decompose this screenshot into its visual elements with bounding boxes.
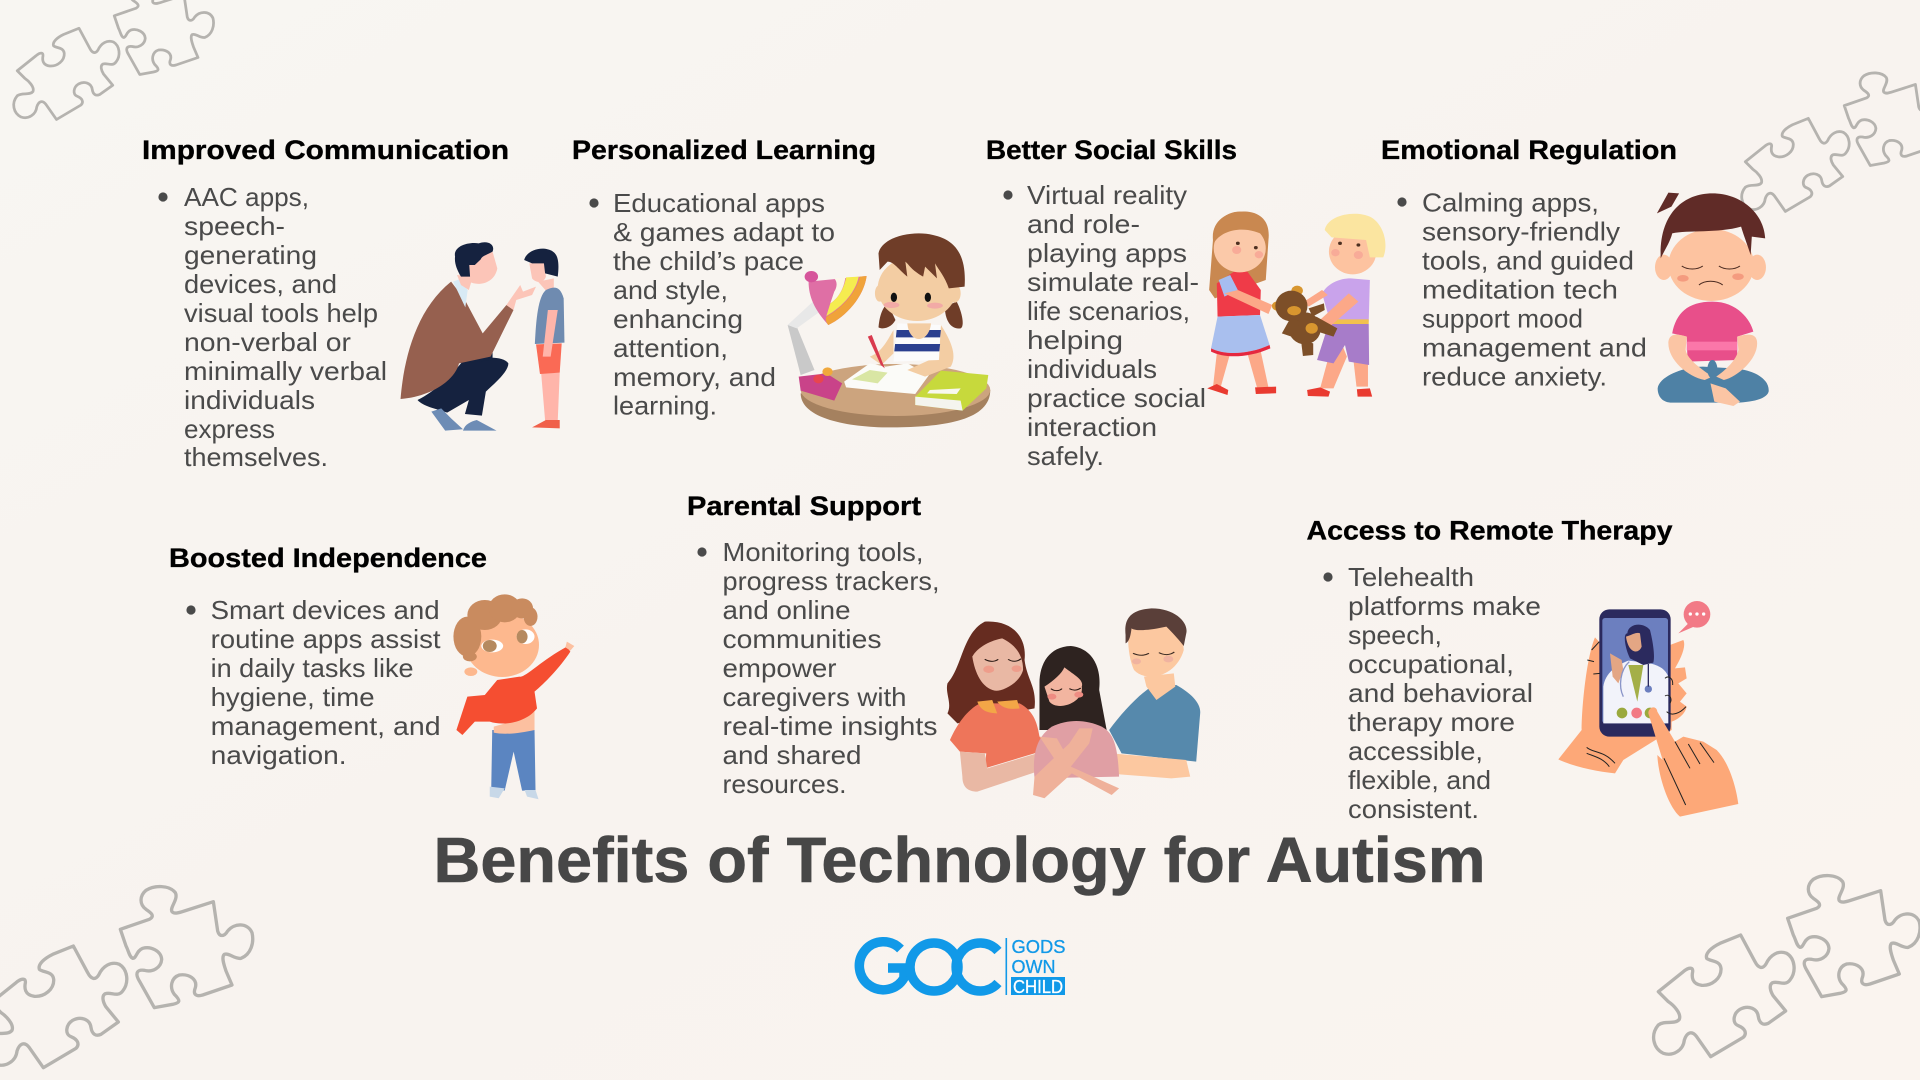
illustration: meditating boy: [1655, 193, 1769, 406]
bullet text: Access to Remote Therapy: consistent.: [1348, 794, 1479, 824]
bullet text: Access to Remote Therapy: accessible,: [1348, 736, 1483, 766]
bullet text: Access to Remote Therapy: speech,: [1348, 620, 1442, 650]
panel: Access to Remote Therapy: [1306, 516, 1738, 824]
bullet text: Improved Communication: devices, and: [184, 269, 337, 299]
bullet text: Personalized Learning: [589, 188, 835, 420]
bullet text: Improved Communication: AAC apps,: [184, 182, 309, 212]
heading: Boosted Independence: Boosted Independence: [169, 543, 487, 573]
bullet text: Emotional Regulation: management and: [1422, 332, 1647, 362]
bullet text: Personalized Learning: learning.: [613, 390, 717, 420]
bullet text: Boosted Independence: routine apps assist: [211, 624, 441, 654]
bullet text: Personalized Learning: & games adapt to: [613, 217, 835, 247]
bullet text: Boosted Independence: in daily tasks like: [211, 653, 414, 683]
panel: Emotional Regulation: [1381, 135, 1769, 406]
bullet text: Parental Support: resources.: [722, 769, 846, 799]
illustration: girl studying at desk with lamp: [788, 233, 990, 427]
bullet text: Boosted Independence: management, and: [211, 711, 441, 741]
bullet text: Boosted Independence: navigation.: [211, 740, 347, 770]
panel: Boosted Independence: [169, 543, 574, 799]
bullet text: Improved Communication: generating: [184, 240, 317, 270]
panel: Better Social Skills: [986, 135, 1385, 471]
illustration: father talking to son: [401, 242, 564, 431]
bullet text: Emotional Regulation: sensory-friendly: [1422, 216, 1620, 246]
bullet text: Better Social Skills: playing apps: [1027, 238, 1187, 268]
heading: Personalized Learning: Personalized Learning: [572, 135, 876, 165]
logo: Gods Own Child: CHILD: [1013, 977, 1063, 997]
bullet text: Access to Remote Therapy: flexible, and: [1348, 765, 1491, 795]
bullet text: Better Social Skills: individuals: [1027, 354, 1157, 384]
bullet text: Access to Remote Therapy: therapy more: [1348, 707, 1515, 737]
heading: Better Social Skills: Better Social Skills: [986, 135, 1237, 165]
bullet text: Emotional Regulation: meditation tech: [1422, 274, 1618, 304]
bullet text: Parental Support: caregivers with: [722, 682, 906, 712]
bullet text: Better Social Skills: practice social: [1027, 383, 1206, 413]
illustration: two children sharing a teddy bear: [1207, 211, 1385, 397]
bullet text: Improved Communication: speech-: [184, 211, 285, 241]
bullet text: Parental Support: progress trackers,: [722, 566, 940, 596]
icon: teddy bear: [1272, 286, 1337, 356]
bullet text: Emotional Regulation: Calming apps,: [1422, 187, 1599, 217]
logo: Gods Own Child: OWN: [1012, 957, 1056, 977]
bullet text: Emotional Regulation: tools, and guided: [1422, 245, 1634, 275]
panel: Improved Communication: [142, 135, 564, 472]
bullet text: Parental Support: [697, 537, 940, 799]
bullet text: Access to Remote Therapy: occupational,: [1348, 649, 1514, 679]
icon: GOC letters: [859, 942, 998, 991]
bullet text: Parental Support: real-time insights: [722, 711, 938, 741]
icon: speech bubble: [1678, 601, 1710, 633]
bullet text: Personalized Learning: enhancing: [613, 304, 743, 334]
bullet text: Improved Communication: themselves.: [184, 442, 328, 472]
illustration: hands holding phone with doctor video call: [1558, 601, 1738, 817]
icon: puzzle pieces bottom right: [1654, 876, 1920, 1057]
bullet text: Better Social Skills: Virtual reality: [1027, 180, 1187, 210]
bullet text: Personalized Learning: Educational apps: [613, 188, 825, 218]
logo: Gods Own Child: GODS: [1012, 937, 1066, 957]
bullet text: Personalized Learning: memory, and: [613, 362, 776, 392]
heading: Emotional Regulation: Emotional Regulation: [1381, 135, 1677, 165]
illustration: family of three: [947, 608, 1200, 798]
bullet text: Better Social Skills: interaction: [1027, 412, 1157, 442]
bullet text: Improved Communication: non-verbal or: [184, 327, 351, 357]
bullet text: Personalized Learning: attention,: [613, 333, 728, 363]
bullet text: Boosted Independence: Smart devices and: [211, 595, 440, 625]
bullet text: Parental Support: empower: [722, 653, 837, 683]
bullet text: Improved Communication: [158, 182, 387, 472]
icon: puzzle pieces top right: [1742, 73, 1920, 211]
bullet text: Parental Support: and shared: [722, 740, 862, 770]
bullet text: Improved Communication: individuals: [184, 385, 315, 415]
bullet text: Emotional Regulation: support mood: [1422, 303, 1583, 333]
heading: Improved Communication: Improved Communication: [142, 135, 509, 165]
panel: Personalized Learning: [572, 135, 990, 427]
bullet text: Better Social Skills: helping: [1027, 325, 1123, 355]
logo: Gods Own Child: [859, 937, 1066, 997]
bullet text: Better Social Skills: safely.: [1027, 441, 1104, 471]
bullet text: Boosted Independence: [186, 595, 441, 770]
bullet text: Personalized Learning: and style,: [613, 275, 728, 305]
bullet text: Boosted Independence: hygiene, time: [211, 682, 375, 712]
bullet text: Access to Remote Therapy: platforms make: [1348, 591, 1541, 621]
bullet text: Better Social Skills: [1003, 180, 1206, 471]
bullet text: Emotional Regulation: [1397, 187, 1647, 391]
bullet text: Improved Communication: visual tools help: [184, 298, 378, 328]
bullet text: Better Social Skills: life scenarios,: [1027, 296, 1190, 326]
bullet text: Access to Remote Therapy: Telehealth: [1348, 562, 1474, 592]
bullet text: Better Social Skills: simulate real-: [1027, 267, 1199, 297]
bullet text: Access to Remote Therapy: and behavioral: [1348, 678, 1533, 708]
icon: puzzle pieces top left: [14, 0, 214, 119]
heading: Parental Support: Parental Support: [687, 491, 921, 521]
bullet text: Emotional Regulation: reduce anxiety.: [1422, 361, 1607, 391]
bullet text: Parental Support: Monitoring tools,: [722, 537, 924, 567]
bullet text: Better Social Skills: and role-: [1027, 209, 1140, 239]
bullet text: Improved Communication: minimally verbal: [184, 356, 387, 386]
title: Benefits of Technology for Autism: [434, 824, 1486, 896]
bullet text: Parental Support: communities: [722, 624, 882, 654]
bullet text: Parental Support: and online: [722, 595, 850, 625]
bullet text: Improved Communication: express: [184, 414, 275, 444]
bullet text: Personalized Learning: the child’s pace: [613, 246, 804, 276]
bullet text: Access to Remote Therapy: [1323, 562, 1541, 824]
panel: Parental Support: [687, 491, 1200, 799]
illustration: boy pointing upward: [453, 594, 574, 799]
icon: puzzle pieces bottom left: [0, 887, 253, 1068]
heading: Access to Remote Therapy: Access to Remote Therapy: [1306, 516, 1672, 546]
